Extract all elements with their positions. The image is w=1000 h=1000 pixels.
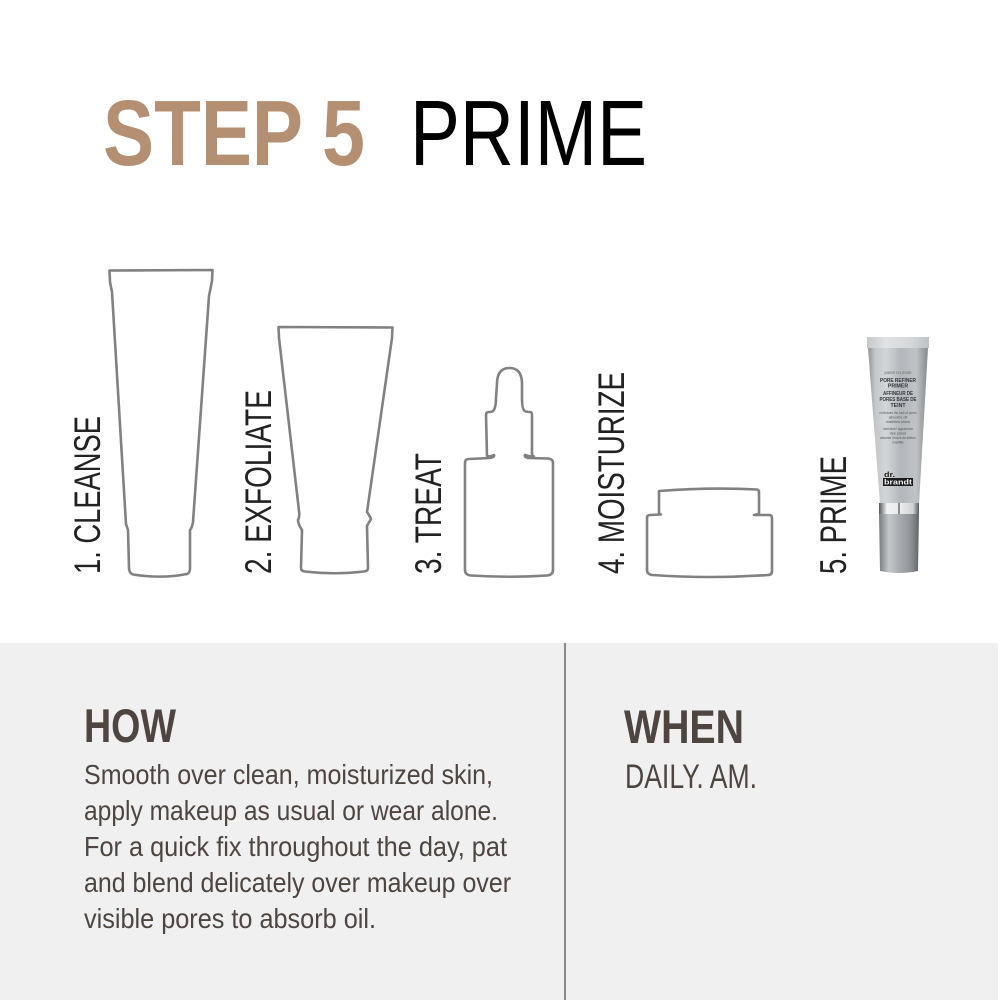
vertical divider [564, 643, 566, 1000]
product label text: PORES BASE DE [880, 397, 917, 403]
product brand mark: brandt [884, 478, 913, 486]
title [103, 81, 647, 185]
title: step 5: STEP [103, 81, 303, 185]
collar [879, 503, 919, 514]
title: prime: PRIME [410, 81, 647, 185]
panel: how [84, 699, 511, 934]
body text: how instructions: For a quick fix throughout the day, pat [84, 831, 507, 862]
product label text: pores no more [884, 370, 912, 375]
product label text: PORE REFINER [880, 378, 916, 384]
tube body [868, 348, 928, 504]
icon: cream jar outline [647, 489, 772, 577]
icon: dropper bottle outline [465, 368, 553, 577]
label: 3. treat: 3. TREAT [408, 453, 449, 574]
body text: how instructions: visible pores to absorb oil. [84, 903, 376, 934]
product brand mark: dr. [884, 470, 895, 479]
label: 2. exfoliate: 2. EXFOLIATE [238, 390, 279, 574]
product brand mark [883, 470, 913, 486]
product label text: AFFINEUR DE [883, 391, 913, 397]
product label text: mattifies shine [886, 420, 910, 424]
heading: when: WHEN [624, 700, 744, 753]
heading: how: HOW [84, 699, 177, 752]
product label text: TEINT [890, 403, 906, 409]
product: primer tube [867, 337, 929, 573]
body text: how instructions [84, 759, 511, 934]
icon: cleanser tube outline [110, 270, 212, 577]
body text: how instructions: apply makeup as usual or wear alone. [84, 795, 498, 826]
product label text: des pores [890, 432, 906, 436]
body text: how instructions: Smooth over clean, moisturized skin, [84, 759, 493, 790]
label: 4. moisturize: 4. MOISTURIZE [591, 372, 632, 574]
product label text [880, 370, 917, 444]
label: 5. prime: 5. PRIME [813, 456, 854, 574]
icon: exfoliator tube outline [278, 327, 392, 573]
tube crimp [867, 337, 929, 348]
cap [879, 514, 919, 573]
product label text: minimizes the look of pores [880, 411, 917, 415]
product label text: matifie [892, 440, 904, 444]
label: 1. cleanse: 1. CLEANSE [67, 416, 108, 574]
product label text: absorbs oil [889, 416, 907, 420]
body text: how instructions: and blend delicately over makeup over [84, 867, 511, 898]
panel: when [624, 700, 757, 796]
product label text: minimise l'apparence [883, 427, 913, 431]
body text: when timing: DAILY. AM. [625, 758, 757, 796]
step products row [67, 270, 929, 577]
product label text: PRIMER [888, 384, 908, 390]
product label text: absorbe l'excès de sébum [880, 436, 916, 440]
panel: how and when background [0, 643, 998, 1000]
title: step 5: 5 [322, 81, 365, 185]
